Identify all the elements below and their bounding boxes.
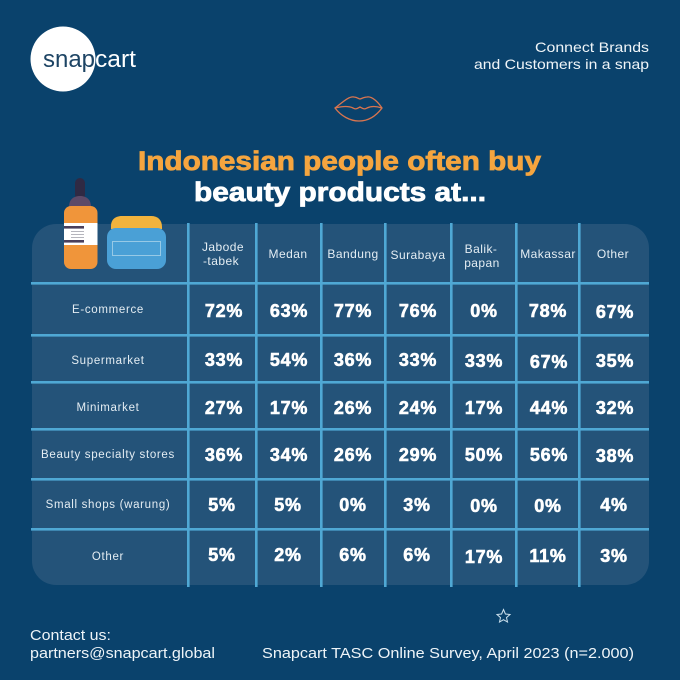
row: E-commerce: 63%	[270, 301, 308, 321]
row: Minimarket: 17%	[465, 398, 503, 418]
row: Other: 6%	[339, 545, 367, 565]
title	[138, 146, 541, 207]
row: E-commerce: 72%	[205, 301, 243, 321]
title: beauty products at...	[194, 177, 486, 207]
row: Other: 2%	[274, 545, 302, 565]
row: Small shops (warung): 0%	[470, 496, 498, 516]
row: Other: 11%	[529, 546, 567, 566]
column headers: Medan	[269, 247, 307, 261]
logo: snapcart	[30, 26, 136, 92]
row: Other: 6%	[403, 545, 431, 565]
row: Minimarket: 26%	[334, 398, 372, 418]
tagline: Connect Brands	[535, 39, 649, 55]
row: E-commerce: 77%	[334, 301, 372, 321]
row: Beauty specialty stores: 36%	[205, 445, 243, 465]
row: Small shops (warung)	[46, 495, 628, 516]
contact: Contact us:	[30, 627, 111, 644]
column headers: -tabek	[203, 254, 240, 268]
row: Beauty specialty stores: 50%	[465, 445, 503, 465]
row: Supermarket: 33%	[205, 350, 243, 370]
row: Small shops (warung): 5%	[274, 495, 302, 515]
row: Minimarket: 32%	[596, 398, 634, 418]
row: E-commerce: 67%	[596, 302, 634, 322]
row: Minimarket: 24%	[399, 398, 437, 418]
row: Other: 5%	[208, 545, 236, 565]
row: Supermarket: 36%	[334, 350, 372, 370]
title: Indonesian people often buy	[138, 146, 541, 176]
column headers: Balik-	[465, 242, 497, 256]
row: Beauty specialty stores: 26%	[334, 445, 372, 465]
row: Small shops (warung): Small shops (warung)	[46, 499, 170, 511]
icon: lips	[335, 97, 382, 121]
column headers: Bandung	[327, 247, 379, 261]
row: Other: 3%	[600, 546, 628, 566]
row: Supermarket	[71, 350, 634, 372]
row: Minimarket: 44%	[530, 398, 568, 418]
contact	[30, 627, 215, 662]
row: E-commerce	[72, 301, 634, 322]
column headers: Jabode	[202, 240, 244, 254]
row: Supermarket: 35%	[596, 351, 634, 371]
row: E-commerce: E-commerce	[72, 304, 144, 316]
row: Beauty specialty stores: 56%	[530, 445, 568, 465]
row: Beauty specialty stores: Beauty specialty stores	[41, 449, 175, 461]
row: Small shops (warung): 0%	[339, 495, 367, 515]
logo: snapcart: cart	[95, 46, 136, 73]
row: Supermarket: Supermarket	[71, 355, 145, 367]
row: E-commerce: 0%	[470, 301, 498, 321]
source: Snapcart TASC Online Survey, April 2023 (n=2.000)	[262, 645, 634, 662]
row: E-commerce: 78%	[529, 301, 567, 321]
tagline	[474, 39, 649, 72]
row: Minimarket	[76, 398, 634, 418]
row: Other: 17%	[465, 547, 503, 567]
row: Beauty specialty stores	[41, 445, 634, 466]
column headers: Surabaya	[391, 248, 445, 262]
row: Supermarket: 54%	[270, 350, 308, 370]
row: Supermarket: 67%	[530, 352, 568, 372]
contact: partners@snapcart.global	[30, 645, 215, 662]
row: Small shops (warung): 3%	[403, 495, 431, 515]
column headers: papan	[464, 256, 500, 270]
row: Beauty specialty stores: 38%	[596, 446, 634, 466]
icon: serum bottle	[64, 178, 98, 269]
row: Minimarket: Minimarket	[76, 402, 140, 414]
row: Minimarket: 27%	[205, 398, 243, 418]
row: Supermarket: 33%	[465, 351, 503, 371]
tagline: and Customers in a snap	[474, 56, 649, 72]
row: Beauty specialty stores: 34%	[270, 445, 308, 465]
table panel	[31, 223, 649, 587]
column headers	[202, 240, 629, 270]
row: Supermarket: 33%	[399, 350, 437, 370]
column headers: Makassar	[520, 247, 576, 261]
row: Minimarket: 17%	[270, 398, 308, 418]
row: E-commerce: 76%	[399, 301, 437, 321]
column headers: Other	[597, 247, 629, 261]
icon: star	[497, 610, 510, 622]
icon: cream jar	[107, 216, 166, 269]
row: Beauty specialty stores: 29%	[399, 445, 437, 465]
row: Other: Other	[92, 551, 124, 563]
row: Other	[92, 545, 628, 567]
row: Small shops (warung): 4%	[600, 495, 628, 515]
logo: snapcart: snap	[43, 46, 95, 73]
row: Small shops (warung): 0%	[534, 496, 562, 516]
row: Small shops (warung): 5%	[208, 495, 236, 515]
